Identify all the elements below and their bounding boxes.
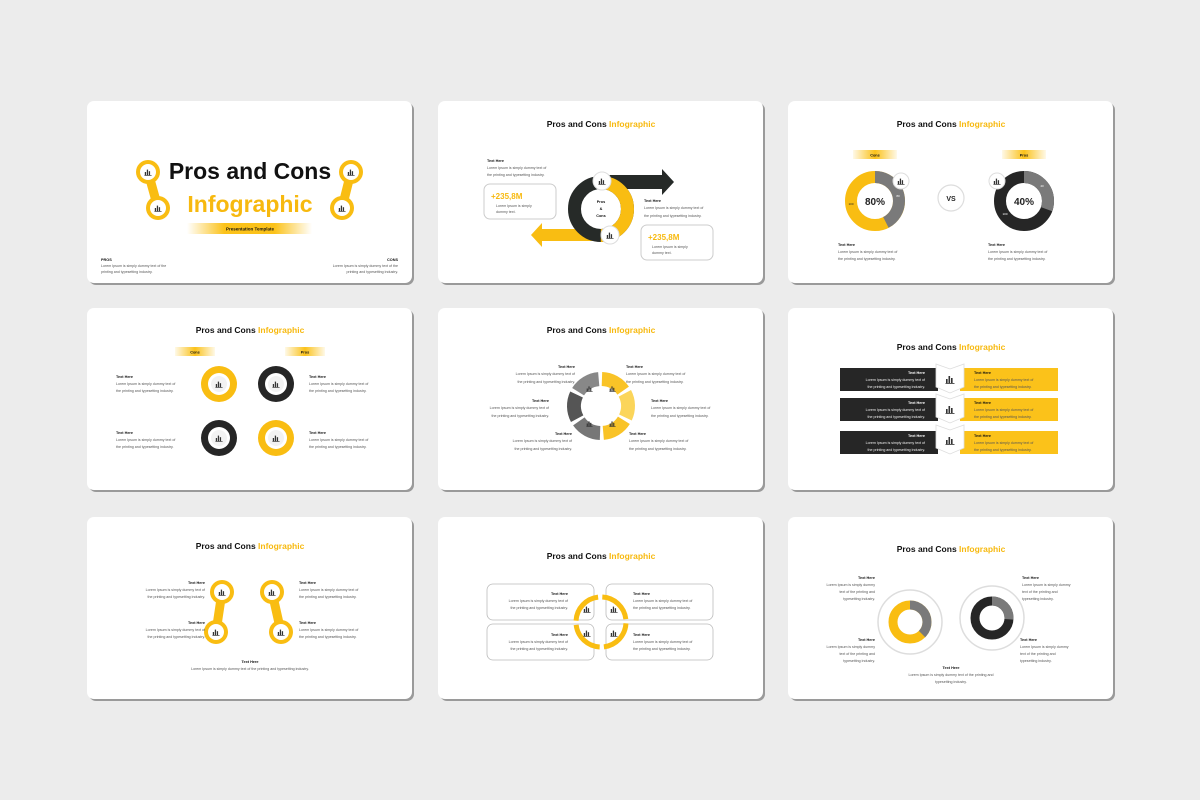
yellow texts: the printing and typesetting industry. <box>974 385 1031 389</box>
dark texts: Text Here <box>908 371 925 375</box>
texts right: Text Here <box>651 399 668 403</box>
texts: Lorem Ipsum is simply dummy text of the printing and <box>908 673 994 677</box>
icons <box>583 607 618 637</box>
text left: Lorem Ipsum is simply dummy text of <box>487 166 546 170</box>
texts: Lorem Ipsum is simply dummy <box>826 645 875 649</box>
text right: Text Here <box>644 199 661 203</box>
ring: Cons <box>596 214 606 218</box>
texts: Lorem Ipsum is simply dummy text of <box>633 640 692 644</box>
ring: Pros <box>597 200 605 204</box>
tag cons <box>853 150 897 159</box>
slide 8: boxes ring <box>438 517 765 701</box>
heading: Infographic <box>187 191 313 217</box>
texts: Lorem Ipsum is simply dummy text of <box>146 628 205 632</box>
stat box left <box>484 184 556 219</box>
texts right: the printing and typesetting industry. <box>629 447 686 451</box>
text left <box>838 243 897 261</box>
texts: the printing and typesetting industry. <box>511 647 568 651</box>
text right: Lorem Ipsum is simply dummy text of <box>644 206 703 210</box>
yellow texts: Text Here <box>974 371 991 375</box>
texts: typesetting industry. <box>1022 597 1054 601</box>
stat box left: +235,8M <box>491 192 523 201</box>
texts: Text Here <box>858 576 875 580</box>
slide 3: donut vs <box>788 101 1115 285</box>
texts left: Text Here <box>555 432 572 436</box>
texts right: the printing and typesetting industry. <box>626 380 683 384</box>
texts: the printing and typesetting industry. <box>116 389 173 393</box>
texts: Text Here <box>241 660 259 664</box>
arrow dark <box>601 169 674 195</box>
stat box right: Lorem Ipsum is simply <box>652 245 688 249</box>
texts: Lorem Ipsum is simply dummy text of <box>146 588 205 592</box>
text left: the printing and typesetting industry. <box>838 257 895 261</box>
tag pros <box>1002 150 1046 159</box>
texts: Lorem Ipsum is simply dummy text of <box>116 382 175 386</box>
chevrons <box>936 364 964 454</box>
texts left: Text Here <box>532 399 549 403</box>
tags <box>175 347 325 356</box>
title: Pros and Cons Infographic <box>897 544 1006 554</box>
yellow texts: Text Here <box>974 401 991 405</box>
pros text <box>101 258 166 274</box>
texts left: the printing and typesetting industry. <box>518 380 575 384</box>
donut pros: 40% <box>1014 197 1034 208</box>
dark texts: Text Here <box>908 401 925 405</box>
texts: text of the printing and <box>839 652 875 656</box>
stat box right <box>641 225 713 260</box>
texts: the printing and typesetting industry. <box>309 445 366 449</box>
slide 7: chains <box>87 517 414 701</box>
texts: the printing and typesetting industry. <box>511 606 568 610</box>
texts: Text Here <box>858 638 875 642</box>
texts: the printing and typesetting industry. <box>633 647 690 651</box>
texts left <box>490 365 575 451</box>
text left: the printing and typesetting industry. <box>487 173 544 177</box>
vs <box>938 185 964 211</box>
texts: the printing and typesetting industry. <box>148 595 205 599</box>
text left: Lorem Ipsum is simply dummy text of <box>838 250 897 254</box>
texts: the printing and typesetting industry. <box>633 606 690 610</box>
texts right: Lorem Ipsum is simply dummy text of <box>629 439 688 443</box>
texts <box>826 576 1071 684</box>
dark texts: the printing and typesetting industry. <box>868 385 925 389</box>
ring quadrants <box>575 596 627 648</box>
texts: Text Here <box>551 592 568 596</box>
stat box left: dummy text. <box>496 210 516 214</box>
tags: Pros <box>301 350 309 354</box>
texts: Lorem Ipsum is simply dummy text of <box>309 438 368 442</box>
dark texts: Lorem Ipsum is simply dummy text of <box>866 408 925 412</box>
donut cons: 100 <box>848 202 854 206</box>
texts: Text Here <box>188 621 205 625</box>
texts: Lorem Ipsum is simply dummy text of <box>633 599 692 603</box>
donut pros: 100 <box>1002 212 1008 216</box>
heading <box>169 158 331 217</box>
yellow texts: Lorem Ipsum is simply dummy text of <box>974 378 1033 382</box>
texts right: Text Here <box>629 432 646 436</box>
texts: the printing and typesetting industry. <box>299 635 356 639</box>
texts: Text Here <box>309 375 326 379</box>
donut left <box>878 590 942 654</box>
rings <box>201 366 294 456</box>
texts: Text Here <box>299 581 316 585</box>
heading: Pros and Cons <box>169 158 331 184</box>
stat box right: dummy text. <box>652 251 672 255</box>
title: Pros and Cons Infographic <box>196 325 305 335</box>
yellow texts: Lorem Ipsum is simply dummy text of <box>974 441 1033 445</box>
donut right <box>960 586 1024 650</box>
bars <box>840 368 1058 454</box>
texts: typesetting industry. <box>843 659 875 663</box>
dark texts: Lorem Ipsum is simply dummy text of <box>866 378 925 382</box>
texts: Text Here <box>116 431 133 435</box>
texts: Text Here <box>299 621 316 625</box>
texts right: the printing and typesetting industry. <box>651 414 708 418</box>
texts left: Lorem Ipsum is simply dummy text of <box>490 406 549 410</box>
texts left: Lorem Ipsum is simply dummy text of <box>513 439 572 443</box>
texts left: Text Here <box>558 365 575 369</box>
dark texts: the printing and typesetting industry. <box>868 448 925 452</box>
texts: Lorem Ipsum is simply dummy <box>1022 583 1071 587</box>
texts: typesetting industry. <box>843 597 875 601</box>
donut cons: 80% <box>865 197 885 208</box>
texts: the printing and typesetting industry. <box>116 445 173 449</box>
text left: Text Here <box>838 243 855 247</box>
slide 9: two donuts <box>788 517 1115 701</box>
donut pros: 40 <box>1040 184 1044 188</box>
text right: the printing and typesetting industry. <box>988 257 1045 261</box>
texts: the printing and typesetting industry. <box>299 595 356 599</box>
texts: the printing and typesetting industry. <box>309 389 366 393</box>
slide 4: four rings <box>87 308 414 492</box>
title: Pros and Cons Infographic <box>547 325 656 335</box>
slide 5: segmented ring <box>438 308 765 492</box>
texts right: Lorem Ipsum is simply dummy text of <box>651 406 710 410</box>
texts left: Lorem Ipsum is simply dummy text of <box>516 372 575 376</box>
texts: Text Here <box>1022 576 1039 580</box>
dark texts: Text Here <box>908 434 925 438</box>
texts: text of the printing and <box>1020 652 1056 656</box>
text right: Text Here <box>988 243 1005 247</box>
texts left: the printing and typesetting industry. <box>492 414 549 418</box>
texts right: Lorem Ipsum is simply dummy text of <box>626 372 685 376</box>
cons text: CONS <box>387 258 398 262</box>
cons text: Lorem Ipsum is simply dummy text of the <box>333 264 398 268</box>
texts left: the printing and typesetting industry. <box>515 447 572 451</box>
text left <box>487 159 546 177</box>
ring <box>574 182 628 236</box>
texts: Text Here <box>633 592 650 596</box>
texts: Lorem Ipsum is simply dummy text of <box>299 628 358 632</box>
yellow texts: Lorem Ipsum is simply dummy text of <box>974 408 1033 412</box>
slide 6: rows <box>788 308 1115 492</box>
title: Pros and Cons Infographic <box>196 541 305 551</box>
texts: Lorem Ipsum is simply dummy text of <box>299 588 358 592</box>
subtitle bar <box>187 223 312 234</box>
stat box left: Lorem Ipsum is simply <box>496 204 532 208</box>
text right <box>988 243 1047 261</box>
texts: text of the printing and <box>839 590 875 594</box>
cons text: printing and typesetting industry. <box>347 270 398 274</box>
donut cons <box>848 173 909 225</box>
vs: VS <box>946 196 956 203</box>
texts: Lorem Ipsum is simply dummy text of the printing and typesetting industry. <box>191 667 309 671</box>
yellow texts <box>974 371 1033 452</box>
texts: Lorem Ipsum is simply dummy <box>1020 645 1069 649</box>
yellow texts: the printing and typesetting industry. <box>974 415 1031 419</box>
pros text: Lorem Ipsum is simply dummy text of the <box>101 264 166 268</box>
texts: Lorem Ipsum is simply dummy text of <box>116 438 175 442</box>
donut cons: 80 <box>896 194 900 198</box>
boxes <box>487 584 713 660</box>
subtitle bar: Presentation Template <box>226 226 274 232</box>
icon chain left <box>136 160 170 220</box>
icon circles <box>593 172 619 244</box>
dark texts <box>866 371 925 452</box>
texts <box>146 581 358 671</box>
stat box right: +235,8M <box>648 233 680 242</box>
arrow yellow <box>531 223 605 247</box>
slide 1: title slide <box>87 101 414 285</box>
slide 2: arrows ring <box>438 101 765 285</box>
texts: the printing and typesetting industry. <box>148 635 205 639</box>
chain left <box>204 580 234 644</box>
texts: Text Here <box>551 633 568 637</box>
ring: & <box>600 207 603 211</box>
text right: the printing and typesetting industry. <box>644 214 701 218</box>
texts: typesetting industry. <box>1020 659 1052 663</box>
texts <box>509 592 692 651</box>
chain right <box>260 580 293 644</box>
texts: Lorem Ipsum is simply dummy text of <box>509 640 568 644</box>
text left: Text Here <box>487 159 504 163</box>
title: Pros and Cons Infographic <box>547 551 656 561</box>
tags: Cons <box>190 350 200 354</box>
icon chain right <box>330 160 363 220</box>
texts: Text Here <box>116 375 133 379</box>
texts right <box>626 365 710 451</box>
yellow texts: Text Here <box>974 434 991 438</box>
texts: Text Here <box>1020 638 1037 642</box>
yellow texts: the printing and typesetting industry. <box>974 448 1031 452</box>
title: Pros and Cons Infographic <box>897 342 1006 352</box>
texts: Text Here <box>309 431 326 435</box>
texts: typesetting industry. <box>935 680 967 684</box>
segments <box>564 369 638 443</box>
donut pros <box>989 173 1048 225</box>
text right <box>644 199 703 218</box>
tag pros: Pros <box>1020 154 1028 158</box>
text right: Lorem Ipsum is simply dummy text of <box>988 250 1047 254</box>
texts: text of the printing and <box>1022 590 1058 594</box>
tag cons: Cons <box>870 154 880 158</box>
cons text <box>333 258 398 274</box>
texts: Text Here <box>942 666 960 670</box>
texts <box>116 375 368 449</box>
pros text: PROS <box>101 258 112 262</box>
dark texts: the printing and typesetting industry. <box>868 415 925 419</box>
texts: Lorem Ipsum is simply dummy text of <box>309 382 368 386</box>
texts: Text Here <box>633 633 650 637</box>
title: Pros and Cons Infographic <box>547 119 656 129</box>
title: Pros and Cons Infographic <box>897 119 1006 129</box>
texts: Lorem Ipsum is simply dummy <box>826 583 875 587</box>
texts: Lorem Ipsum is simply dummy text of <box>509 599 568 603</box>
texts: Text Here <box>188 581 205 585</box>
pros text: printing and typesetting industry. <box>101 270 152 274</box>
dark texts: Lorem Ipsum is simply dummy text of <box>866 441 925 445</box>
texts right: Text Here <box>626 365 643 369</box>
